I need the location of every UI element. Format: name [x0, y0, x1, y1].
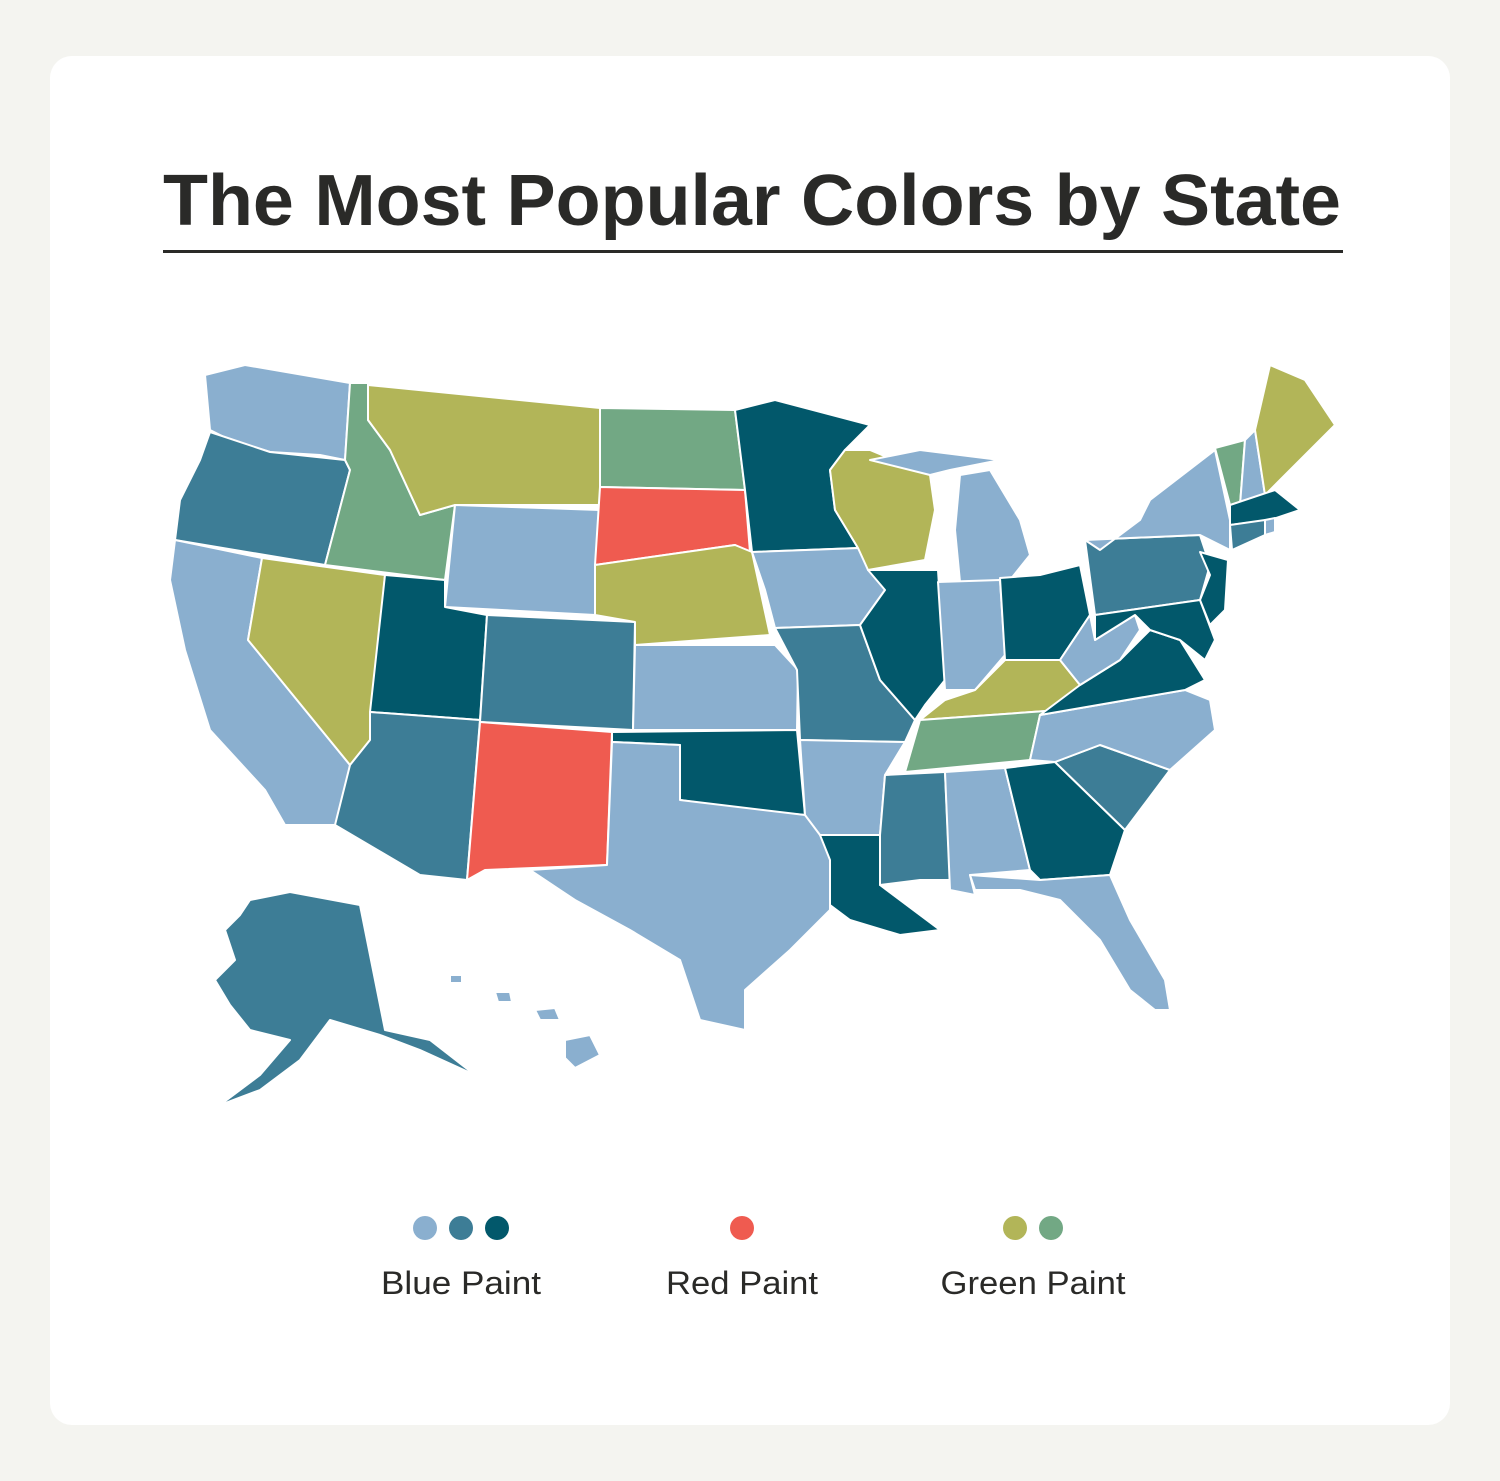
Alaska: [215, 892, 475, 1105]
legend: red paint: Red Paint: [666, 1265, 818, 1301]
legend: green paint: Green Paint: [940, 1265, 1126, 1301]
title: The Most Popular Colors by State: [163, 161, 1341, 241]
legend: blue paint: [381, 1216, 541, 1301]
legend: blue paint: Blue Paint: [381, 1265, 541, 1301]
legend: red paint: [666, 1216, 818, 1301]
Hawaii: [565, 1035, 600, 1068]
legend: green paint: [940, 1216, 1126, 1301]
map: US states: [170, 365, 1335, 1105]
